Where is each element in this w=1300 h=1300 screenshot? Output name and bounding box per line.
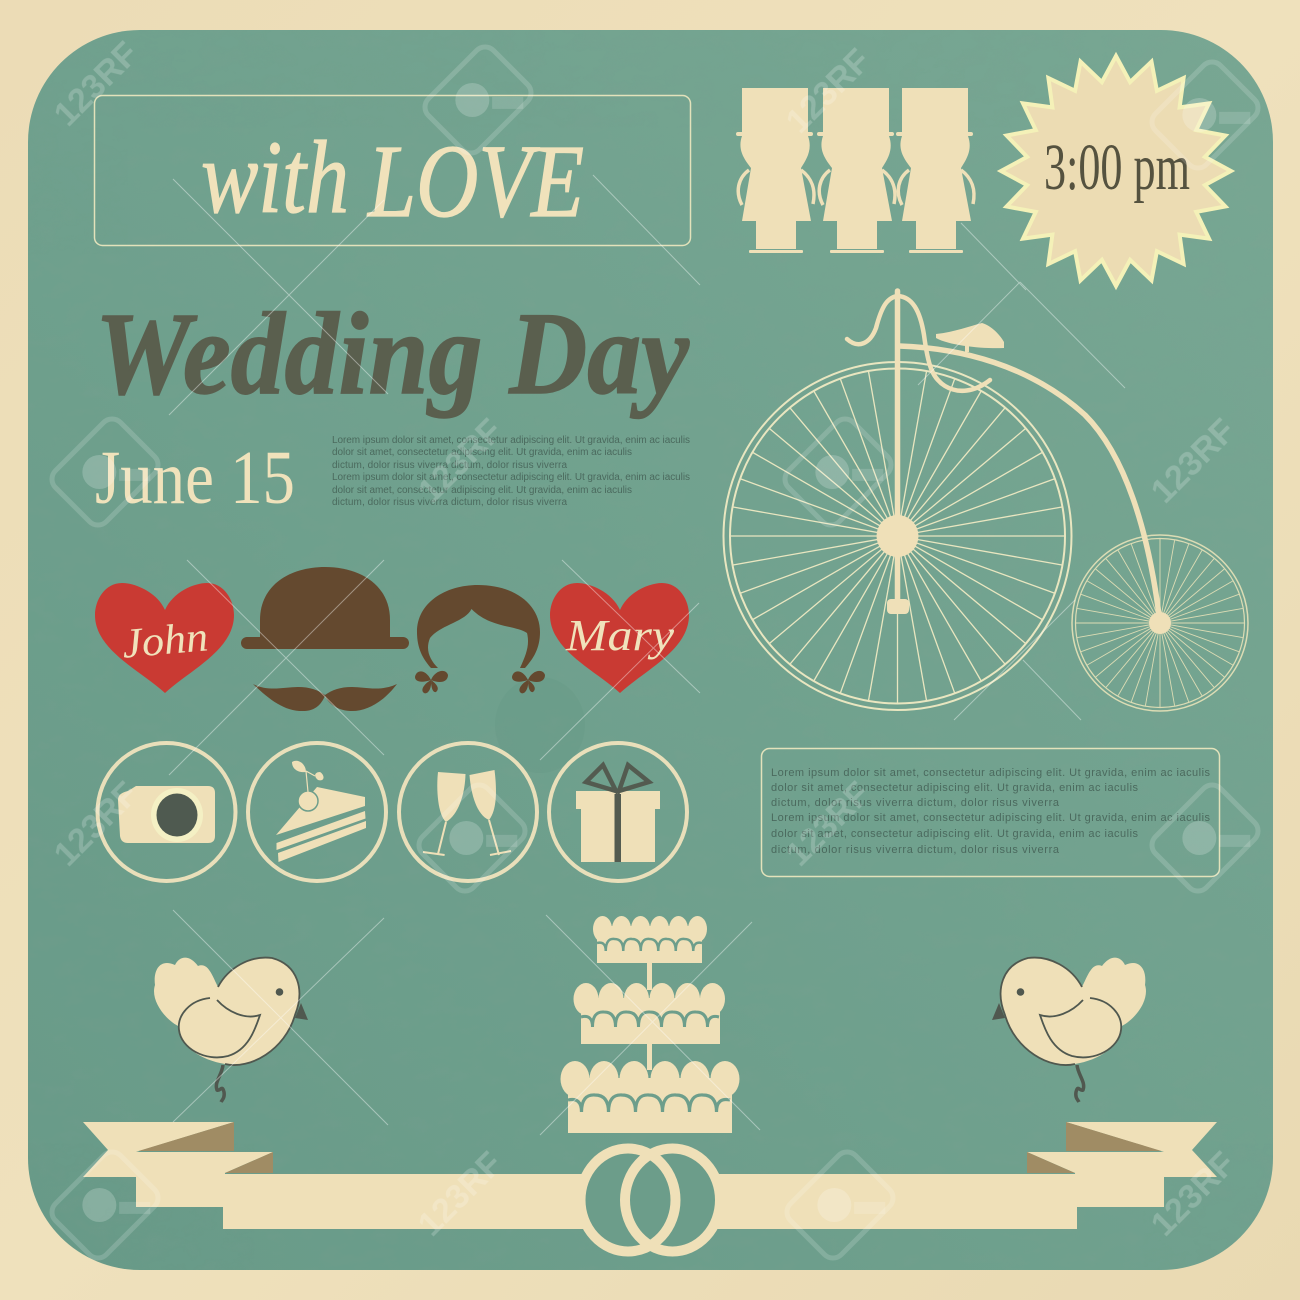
banner ribbon	[83, 1122, 1217, 1229]
icon: champagne glasses in ring	[399, 743, 537, 881]
watermark overlay: 123RF	[1144, 1145, 1243, 1244]
top tier	[593, 916, 707, 963]
with LOVE box: LOVE	[366, 124, 584, 239]
watermark overlay: 123RF	[411, 1145, 510, 1244]
watermark overlay: 123RF	[779, 775, 878, 874]
watermark overlay: 123RF	[779, 42, 878, 141]
text block: lorem ipsum upper: dolor sit amet, consectetur adipiscing elit. Ut gravida, enim ac iaculis	[332, 447, 632, 458]
icon: camera in ring	[98, 743, 236, 881]
frame, handlebar, seat	[847, 291, 1159, 615]
bottom tier	[560, 1061, 740, 1133]
heart: Mary: Mary	[565, 611, 675, 660]
big wheel	[724, 362, 1072, 710]
middle tier	[574, 983, 725, 1044]
text box: lorem ipsum lower	[762, 748, 1220, 876]
text block: lorem ipsum upper: dolor sit amet, consectetur adipiscing elit. Ut gravida, enim ac iaculis	[332, 485, 632, 496]
heart: John: John	[120, 614, 210, 668]
text block: lorem ipsum upper: Lorem ipsum dolor sit amet, consectetur adipiscing elit. Ut gravida, enim ac iaculis	[332, 472, 690, 483]
text box: lorem ipsum lower: dolor sit amet, consectetur adipiscing elit. Ut gravida, enim ac iaculis	[771, 782, 1138, 794]
watermark overlay: 123RF	[47, 775, 146, 874]
title: Wedding Day: Wedding Day	[95, 288, 690, 419]
icon: bride hair with bows	[415, 585, 545, 693]
watermark overlay: 123RF	[1144, 412, 1243, 511]
text box: lorem ipsum lower: dolor sit amet, consectetur adipiscing elit. Ut gravida, enim ac iaculis	[771, 828, 1138, 840]
icon: gift box in ring	[549, 743, 687, 881]
heart: John	[95, 583, 234, 693]
date: June 15: June 15	[95, 436, 295, 520]
time badge: 3:00 pm starburst	[1001, 56, 1231, 286]
icon: left bird	[154, 958, 308, 1102]
heart: Mary	[550, 583, 689, 693]
watermark overlay: 123RF	[47, 35, 146, 134]
time badge: 3:00 pm starburst: 3:00 pm	[1044, 131, 1190, 204]
small wheel	[1072, 535, 1248, 711]
icon: moustache	[253, 684, 397, 711]
with LOVE box: with	[201, 120, 349, 235]
text box: lorem ipsum lower: Lorem ipsum dolor sit amet, consectetur adipiscing elit. Ut gravida, enim ac iaculis	[771, 767, 1210, 779]
icon: tiered wedding cake	[560, 916, 740, 1133]
text block: lorem ipsum upper: dictum, dolor risus viverra dictum, dolor risus viverra	[332, 497, 567, 508]
with LOVE box	[94, 96, 690, 246]
icon: bride and groom silhouettes	[736, 88, 974, 253]
watermark overlay: 123RF	[411, 412, 510, 511]
icon: right bird	[992, 958, 1146, 1102]
text block: lorem ipsum upper: dictum, dolor risus viverra dictum, dolor risus viverra	[332, 460, 567, 471]
icon: groom hat	[241, 567, 409, 649]
text block: lorem ipsum upper	[332, 435, 690, 508]
icon: wedding rings	[576, 1144, 724, 1256]
icon: cake slice in ring	[248, 743, 386, 881]
text box: lorem ipsum lower: dictum, dolor risus viverra dictum, dolor risus viverra	[771, 844, 1060, 856]
icon: penny-farthing bicycle	[724, 291, 1248, 711]
text block: lorem ipsum upper: Lorem ipsum dolor sit amet, consectetur adipiscing elit. Ut gravida, enim ac iaculis	[332, 435, 690, 446]
text box: lorem ipsum lower: dictum, dolor risus viverra dictum, dolor risus viverra	[771, 797, 1060, 809]
text box: lorem ipsum lower: Lorem ipsum dolor sit amet, consectetur adipiscing elit. Ut gravida, enim ac iaculis	[771, 812, 1210, 824]
